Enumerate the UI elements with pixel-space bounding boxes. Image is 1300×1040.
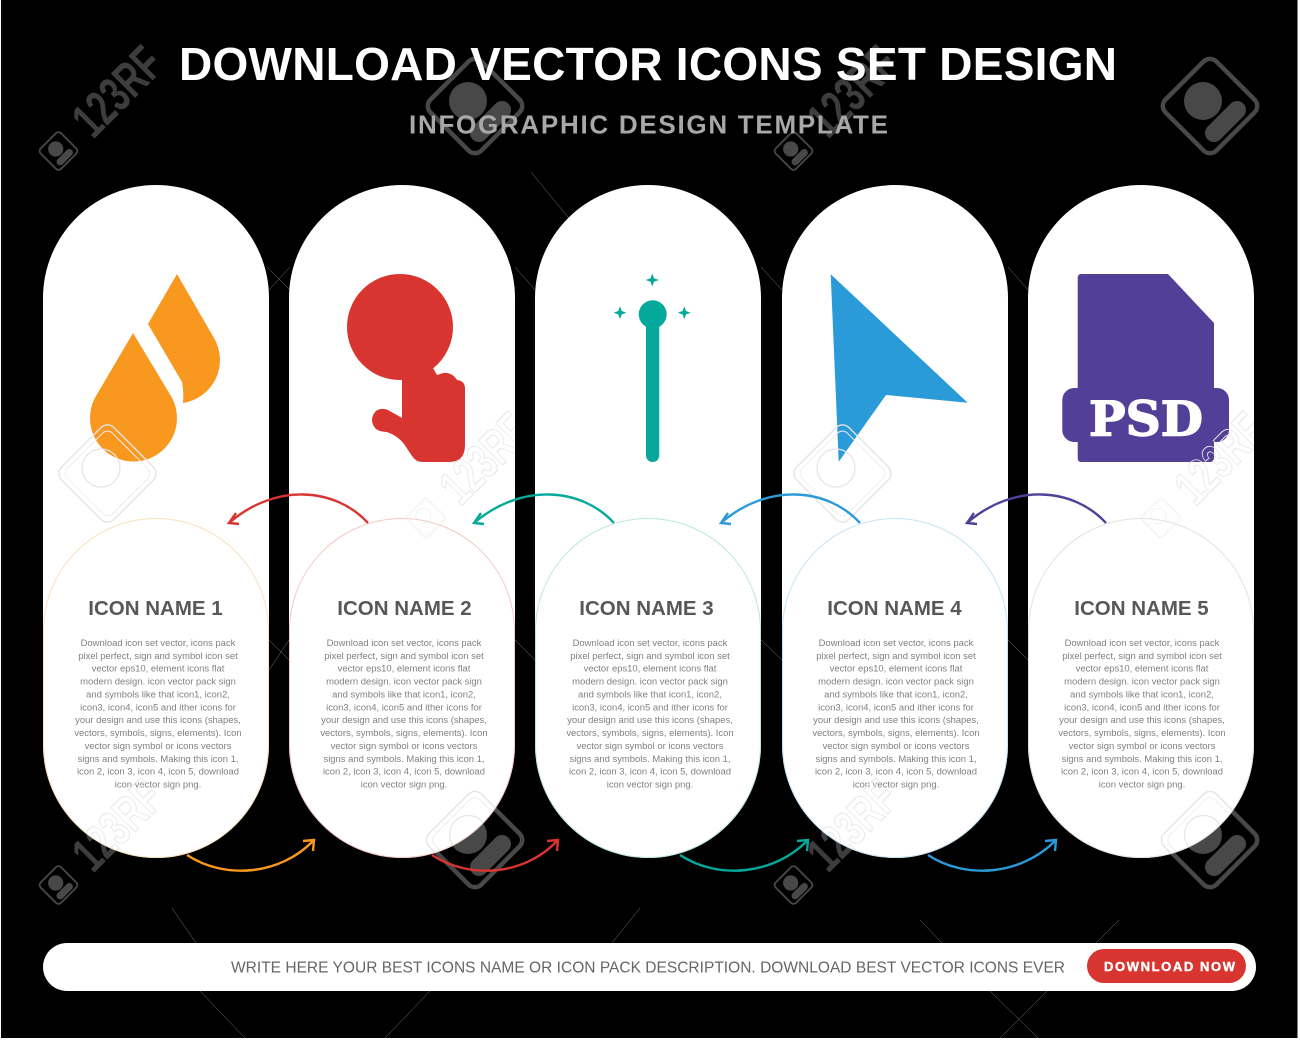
text block 1: and symbols like that icon1, icon2, — [86, 689, 230, 700]
text block 2: and symbols like that icon1, icon2, — [332, 689, 476, 700]
text block 2: icon 2, icon 3, icon 4, icon 5, download — [323, 767, 485, 778]
text block 5: signs and symbols. Making this icon 1, — [1061, 754, 1223, 765]
text block 1: icon 2, icon 3, icon 4, icon 5, download — [77, 767, 239, 778]
heading 3: ICON NAME 3 — [579, 597, 714, 620]
text block 1: icon vector sign png. — [115, 780, 201, 791]
subtitle: INFOGRAPHIC DESIGN TEMPLATE — [409, 110, 888, 140]
text block 2: your design and use this icons (shapes, — [321, 715, 487, 726]
text block 1: modern design. icon vector pack sign — [80, 677, 236, 688]
text block 2: icon vector sign png. — [361, 780, 447, 791]
text block 4: pixel perfect, sign and symbol icon set — [816, 651, 976, 662]
text block 4: vectors, symbols, signs, elements). Icon — [812, 728, 980, 739]
text block 5: icon vector sign png. — [1099, 780, 1185, 791]
text block 3: vector sign symbol or icons vectors — [577, 741, 724, 752]
text block 2: Download icon set vector, icons pack — [327, 638, 482, 649]
text block 5: pixel perfect, sign and symbol icon set — [1062, 651, 1222, 662]
arrow: red forward arrow — [432, 840, 558, 871]
icon: magic wand — [614, 274, 691, 462]
download button — [1087, 949, 1246, 983]
panel: column 3 — [535, 185, 761, 858]
text block 3: your design and use this icons (shapes, — [567, 715, 733, 726]
text block 2: vectors, symbols, signs, elements). Icon — [320, 728, 488, 739]
text block 4: vector eps10, element icons flat — [830, 664, 963, 675]
text block 3: icon vector sign png. — [607, 780, 693, 791]
panel: column 2 — [289, 185, 515, 858]
watermarks on white panels: 123RF — [796, 769, 909, 882]
text block 5: your design and use this icons (shapes, — [1059, 715, 1225, 726]
arrow: purple back arrow — [967, 494, 1106, 524]
lower circle outline 1 — [44, 518, 268, 858]
text block 1: vectors, symbols, signs, elements). Icon — [74, 728, 242, 739]
text block 3: vector eps10, element icons flat — [584, 664, 717, 675]
heading 4: ICON NAME 4 — [827, 597, 962, 620]
icon: PSD file: PSD — [1089, 392, 1203, 448]
text block 2: modern design. icon vector pack sign — [326, 677, 482, 688]
title: DOWNLOAD VECTOR ICONS SET DESIGN — [179, 38, 1117, 90]
panel: column 4 — [782, 185, 1008, 858]
lower circle outline 3 — [536, 518, 760, 858]
arrow: blue back arrow — [721, 494, 860, 524]
text block 4: icon3, icon4, icon5 and ither icons for — [818, 702, 974, 713]
icon: PSD file — [1062, 274, 1229, 462]
bar description text: WRITE HERE YOUR BEST ICONS NAME OR ICON PACK DESCRIPTION. DOWNLOAD BEST VECTOR ICONS EVER — [231, 960, 1065, 976]
text block 3: modern design. icon vector pack sign — [572, 677, 728, 688]
text block 3: pixel perfect, sign and symbol icon set — [570, 651, 730, 662]
text block 4: modern design. icon vector pack sign — [818, 677, 974, 688]
text block 5: icon3, icon4, icon5 and ither icons for — [1064, 702, 1220, 713]
text block 4: Download icon set vector, icons pack — [819, 638, 974, 649]
watermarks on white panels — [55, 402, 1276, 892]
text block 2: icon3, icon4, icon5 and ither icons for — [326, 702, 482, 713]
text block 3: icon3, icon4, icon5 and ither icons for — [572, 702, 728, 713]
text block 1: signs and symbols. Making this icon 1, — [77, 754, 239, 765]
text block 4: icon 2, icon 3, icon 4, icon 5, download — [815, 767, 977, 778]
download button: DOWNLOAD NOW — [1104, 959, 1236, 974]
thin cross marks — [172, 172, 1119, 1038]
icon: hand and circle — [347, 274, 465, 462]
arrow: orange forward arrow — [187, 840, 314, 871]
text block 1: pixel perfect, sign and symbol icon set — [78, 651, 238, 662]
watermarks on dark background: 123RF — [61, 769, 174, 882]
text block 3: icon 2, icon 3, icon 4, icon 5, download — [569, 767, 731, 778]
text block 4: signs and symbols. Making this icon 1, — [815, 754, 977, 765]
text block 3: Download icon set vector, icons pack — [573, 638, 728, 649]
text block 1: icon3, icon4, icon5 and ither icons for — [80, 702, 236, 713]
text block 2: vector sign symbol or icons vectors — [331, 741, 478, 752]
icon: water drops — [90, 274, 220, 462]
text block 5: vector sign symbol or icons vectors — [1069, 741, 1216, 752]
watermarks on dark background: 123RF — [796, 769, 909, 882]
text block 3: and symbols like that icon1, icon2, — [578, 689, 722, 700]
lower circle outline 2 — [290, 518, 514, 858]
text block 1: your design and use this icons (shapes, — [75, 715, 241, 726]
watermarks on white panels: 123RF — [61, 769, 174, 882]
text block 1: vector eps10, element icons flat — [92, 664, 225, 675]
panel: column 5 — [1028, 185, 1254, 858]
text block 1: Download icon set vector, icons pack — [81, 638, 236, 649]
watermarks on dark background — [38, 35, 1261, 905]
text block 4: icon vector sign png. — [853, 780, 939, 791]
heading 1: ICON NAME 1 — [88, 597, 223, 620]
arrow: teal back arrow — [474, 494, 614, 524]
text block 4: your design and use this icons (shapes, — [813, 715, 979, 726]
lower circle outline 4 — [782, 518, 1008, 858]
heading 5: ICON NAME 5 — [1074, 597, 1209, 620]
text block 5: vector eps10, element icons flat — [1076, 664, 1209, 675]
watermarks on dark background: 123RF — [796, 35, 909, 148]
text block 4: and symbols like that icon1, icon2, — [824, 689, 968, 700]
text block 2: vector eps10, element icons flat — [338, 664, 471, 675]
panel: column 1 — [43, 185, 269, 858]
text block 5: icon 2, icon 3, icon 4, icon 5, download — [1061, 767, 1223, 778]
arrow: blue forward arrow — [928, 840, 1056, 871]
lower circle outline 5 — [1028, 518, 1254, 858]
watermarks on dark background: 123RF — [61, 35, 174, 148]
text block 2: pixel perfect, sign and symbol icon set — [324, 651, 484, 662]
heading 2: ICON NAME 2 — [337, 597, 472, 620]
arrow: teal forward arrow — [680, 840, 808, 871]
text block 5: and symbols like that icon1, icon2, — [1070, 689, 1214, 700]
text block 3: vectors, symbols, signs, elements). Icon — [566, 728, 734, 739]
bottom bar — [43, 943, 1256, 991]
text block 5: modern design. icon vector pack sign — [1064, 677, 1220, 688]
text block 2: signs and symbols. Making this icon 1, — [323, 754, 485, 765]
text block 1: vector sign symbol or icons vectors — [85, 741, 232, 752]
text block 5: vectors, symbols, signs, elements). Icon — [1058, 728, 1226, 739]
watermarks on white panels: 123RF — [429, 402, 541, 515]
text block 4: vector sign symbol or icons vectors — [823, 741, 970, 752]
arrow: red back arrow — [229, 494, 368, 524]
text block 5: Download icon set vector, icons pack — [1065, 638, 1220, 649]
icon: cursor arrow — [831, 274, 968, 462]
text block 3: signs and symbols. Making this icon 1, — [569, 754, 731, 765]
